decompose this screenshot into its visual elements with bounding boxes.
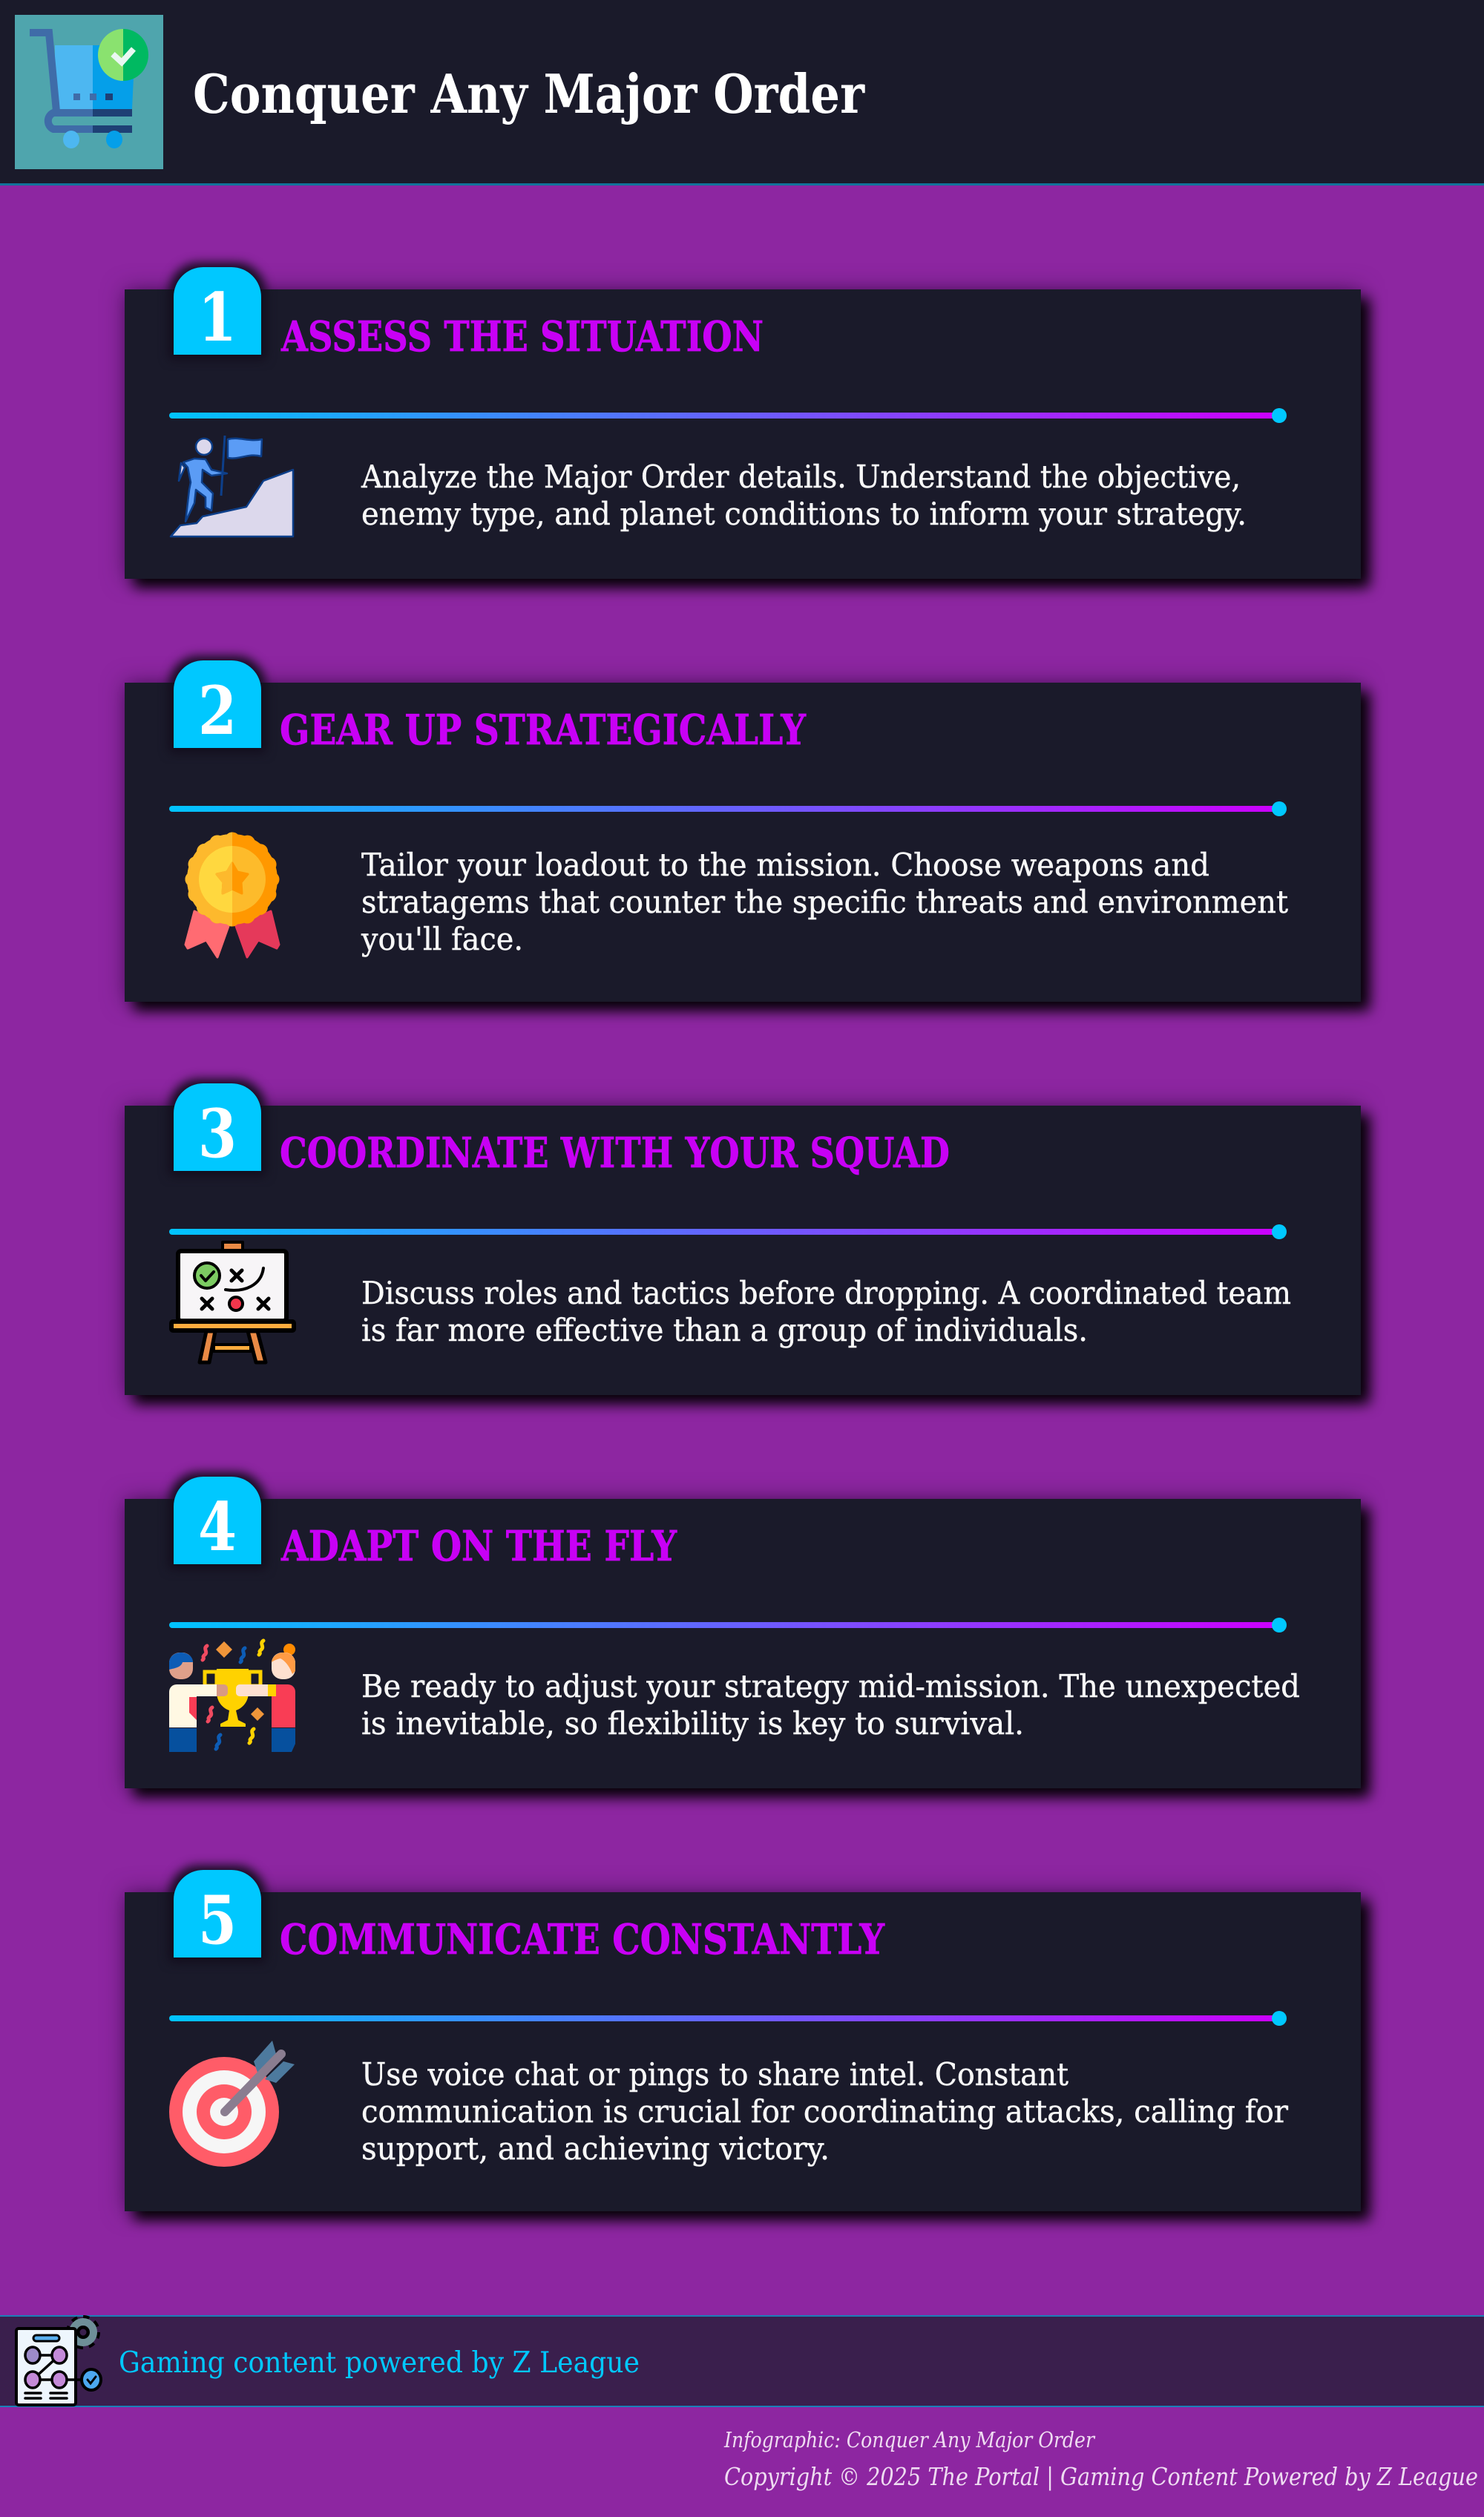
number badge 1: 1: [198, 278, 237, 357]
copyright block: [723, 2427, 1478, 2491]
icon: workflow document with gear: [16, 2321, 101, 2405]
gradient divider with dot: [169, 408, 1287, 423]
step 2 description: [361, 847, 1288, 957]
step 4 description: [361, 1668, 1300, 1742]
number badge 2: [174, 660, 261, 750]
step 1 description: Analyze the Major Order details. Understand the objective,: [361, 459, 1241, 495]
step 2 heading: GEAR UP STRATEGICALLY: [280, 706, 807, 755]
step 4 heading: ADAPT ON THE FLY: [280, 1522, 677, 1571]
step 2 description: you'll face.: [361, 921, 523, 957]
step 2 description: Tailor your loadout to the mission. Choose weapons and: [361, 847, 1209, 883]
step 5 description: [361, 2056, 1289, 2167]
copyright block: Infographic: Conquer Any Major Order: [723, 2427, 1096, 2452]
gradient divider with dot: [169, 1224, 1287, 1239]
panel: step 3 coordinate with your squad: [125, 1083, 1361, 1395]
panel: step 1 assess the situation: [125, 267, 1361, 579]
step 5 description: communication is crucial for coordinating attacks, calling for: [361, 2093, 1289, 2130]
number badge 3: [174, 1083, 261, 1173]
step 5 description: Use voice chat or pings to share intel. Constant: [361, 2056, 1068, 2093]
step 4 description: Be ready to adjust your strategy mid-mission. The unexpected: [361, 1668, 1300, 1704]
gradient divider with dot: [169, 2011, 1287, 2026]
number badge 5: 5: [198, 1881, 237, 1960]
step 3 description: [361, 1275, 1291, 1348]
gradient divider with dot: [169, 801, 1287, 816]
number badge 2: 2: [198, 672, 237, 750]
icon: target with arrow: [169, 2041, 295, 2167]
gradient divider with dot: [169, 1618, 1287, 1632]
number badge 4: 4: [198, 1488, 237, 1566]
step 2 description: stratagems that counter the specific threats and environment: [361, 884, 1288, 920]
number badge 4: [174, 1477, 261, 1566]
panel: step 2 gear up strategically: [125, 660, 1361, 1002]
footer band: [0, 2315, 1484, 2407]
icon: medal rosette: [186, 834, 279, 957]
footer tagline: Gaming content powered by Z League: [119, 2346, 640, 2380]
icon: tactics board on easel: [171, 1242, 294, 1362]
title: Conquer Any Major Order: [193, 62, 865, 125]
step 5 description: support, and achieving victory.: [361, 2130, 830, 2167]
header bar: [0, 0, 1484, 186]
step 5 heading: COMMUNICATE CONSTANTLY: [280, 1915, 885, 1964]
icon: climber with flag: [171, 436, 293, 536]
panel: step 5 communicate constantly: [125, 1870, 1361, 2211]
number badge 5: [174, 1870, 261, 1960]
number badge 1: [174, 267, 261, 357]
step 1 description: enemy type, and planet conditions to inform your strategy.: [361, 496, 1247, 532]
step 4 description: is inevitable, so flexibility is key to survival.: [361, 1705, 1024, 1742]
icon: shopping cart with check: [15, 15, 163, 169]
panel: step 4 adapt on the fly: [125, 1477, 1361, 1788]
step 3 heading: COORDINATE WITH YOUR SQUAD: [280, 1129, 950, 1178]
step 1 description: [361, 459, 1247, 532]
icon: two people sharing a trophy: [169, 1641, 295, 1752]
step 1 heading: ASSESS THE SITUATION: [280, 312, 764, 361]
step 3 description: is far more effective than a group of individuals.: [361, 1312, 1088, 1348]
number badge 3: 3: [198, 1095, 237, 1173]
step 3 description: Discuss roles and tactics before dropping. A coordinated team: [361, 1275, 1291, 1311]
